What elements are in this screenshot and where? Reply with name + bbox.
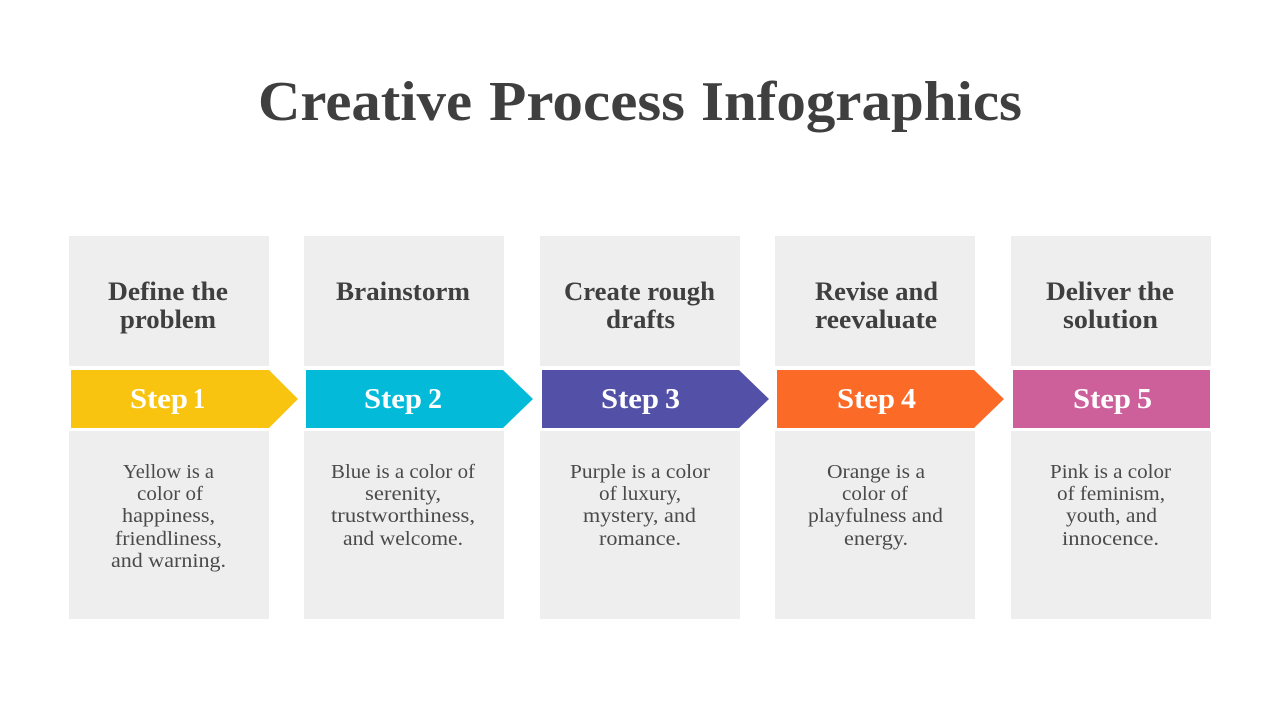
panel: step 2 — [304, 236, 533, 619]
title: Creative — [258, 71, 472, 133]
step 4 heading box — [775, 236, 975, 366]
panel: step 1 — [69, 236, 298, 619]
step 1 description box — [69, 431, 269, 619]
step 5 description: innocence. — [1062, 528, 1159, 550]
step 1 label: 1 — [193, 383, 205, 415]
step 4 description — [808, 461, 943, 550]
panel: step 5 — [1011, 236, 1211, 619]
step 1 heading: problem — [120, 304, 216, 334]
step 3 heading box — [540, 236, 740, 366]
step 4 arrow — [777, 370, 1004, 428]
title: Infographics — [701, 71, 1022, 133]
step 5 description — [1050, 461, 1171, 550]
step 4 label: Step — [837, 383, 895, 415]
step 5 description: of feminism, — [1057, 483, 1165, 505]
step 3 description: romance. — [599, 528, 681, 550]
step 5 description: youth, and — [1066, 505, 1157, 527]
step 1 description: happiness, — [122, 505, 215, 527]
step 2 description: and welcome. — [343, 528, 463, 550]
step 4 heading: reevaluate — [815, 304, 937, 334]
step 5 heading: solution — [1063, 304, 1158, 334]
step 5 heading box — [1011, 236, 1211, 366]
step 2 heading: Brainstorm — [336, 276, 470, 306]
step 4 description: Orange is a — [827, 461, 925, 483]
step 1 description — [111, 461, 226, 572]
step 3 description: Purple is a color — [570, 461, 710, 483]
step 5 label: 5 — [1137, 383, 1152, 415]
step 2 arrow — [306, 370, 533, 428]
step 3 heading: drafts — [606, 304, 675, 334]
step 4 label: 4 — [901, 383, 916, 415]
step 2 description — [331, 461, 475, 550]
panel: step 3 — [540, 236, 769, 619]
step 2 description box — [304, 431, 504, 619]
step 3 description: of luxury, — [599, 483, 681, 505]
step 1 description: color of — [137, 483, 203, 505]
step 4 description: playfulness and — [808, 505, 943, 527]
step 1 heading box — [69, 236, 269, 366]
step 2 description: Blue is a color of — [331, 461, 475, 483]
step 1 description: and warning. — [111, 550, 226, 572]
step 5 heading — [1046, 276, 1174, 334]
step 1 description: friendliness, — [115, 528, 222, 550]
step 1 description: Yellow is a — [123, 461, 214, 483]
step 4 heading — [815, 276, 938, 334]
step 3 label: Step — [601, 383, 659, 415]
step 2 label: Step — [364, 383, 422, 415]
panel: step 4 — [775, 236, 1004, 619]
step 4 description: color of — [842, 483, 908, 505]
step 5 heading: Deliver the — [1046, 276, 1174, 306]
step 3 description box — [540, 431, 740, 619]
step 2 description: serenity, — [365, 483, 441, 505]
step 3 description — [570, 461, 710, 550]
step 3 arrow — [542, 370, 769, 428]
step 3 heading — [564, 276, 715, 334]
step 5 description box — [1011, 431, 1211, 619]
step 2 heading box — [304, 236, 504, 366]
step 1 heading: Define the — [108, 276, 228, 306]
step 1 heading — [108, 276, 228, 334]
step 2 description: trustworthiness, — [331, 505, 475, 527]
step 4 description: energy. — [844, 528, 908, 550]
title: Process — [489, 71, 685, 133]
step 3 description: mystery, and — [583, 505, 696, 527]
step 5 banner — [1013, 370, 1210, 428]
step 5 label: Step — [1073, 383, 1131, 415]
step 5 description: Pink is a color — [1050, 461, 1171, 483]
step 3 label: 3 — [665, 383, 680, 415]
step 2 label: 2 — [428, 383, 442, 415]
step 4 description box — [775, 431, 975, 619]
step 1 arrow — [71, 370, 298, 428]
step 4 heading: Revise and — [815, 276, 938, 306]
step 3 heading: Create rough — [564, 276, 715, 306]
step 1 label: Step — [130, 383, 188, 415]
